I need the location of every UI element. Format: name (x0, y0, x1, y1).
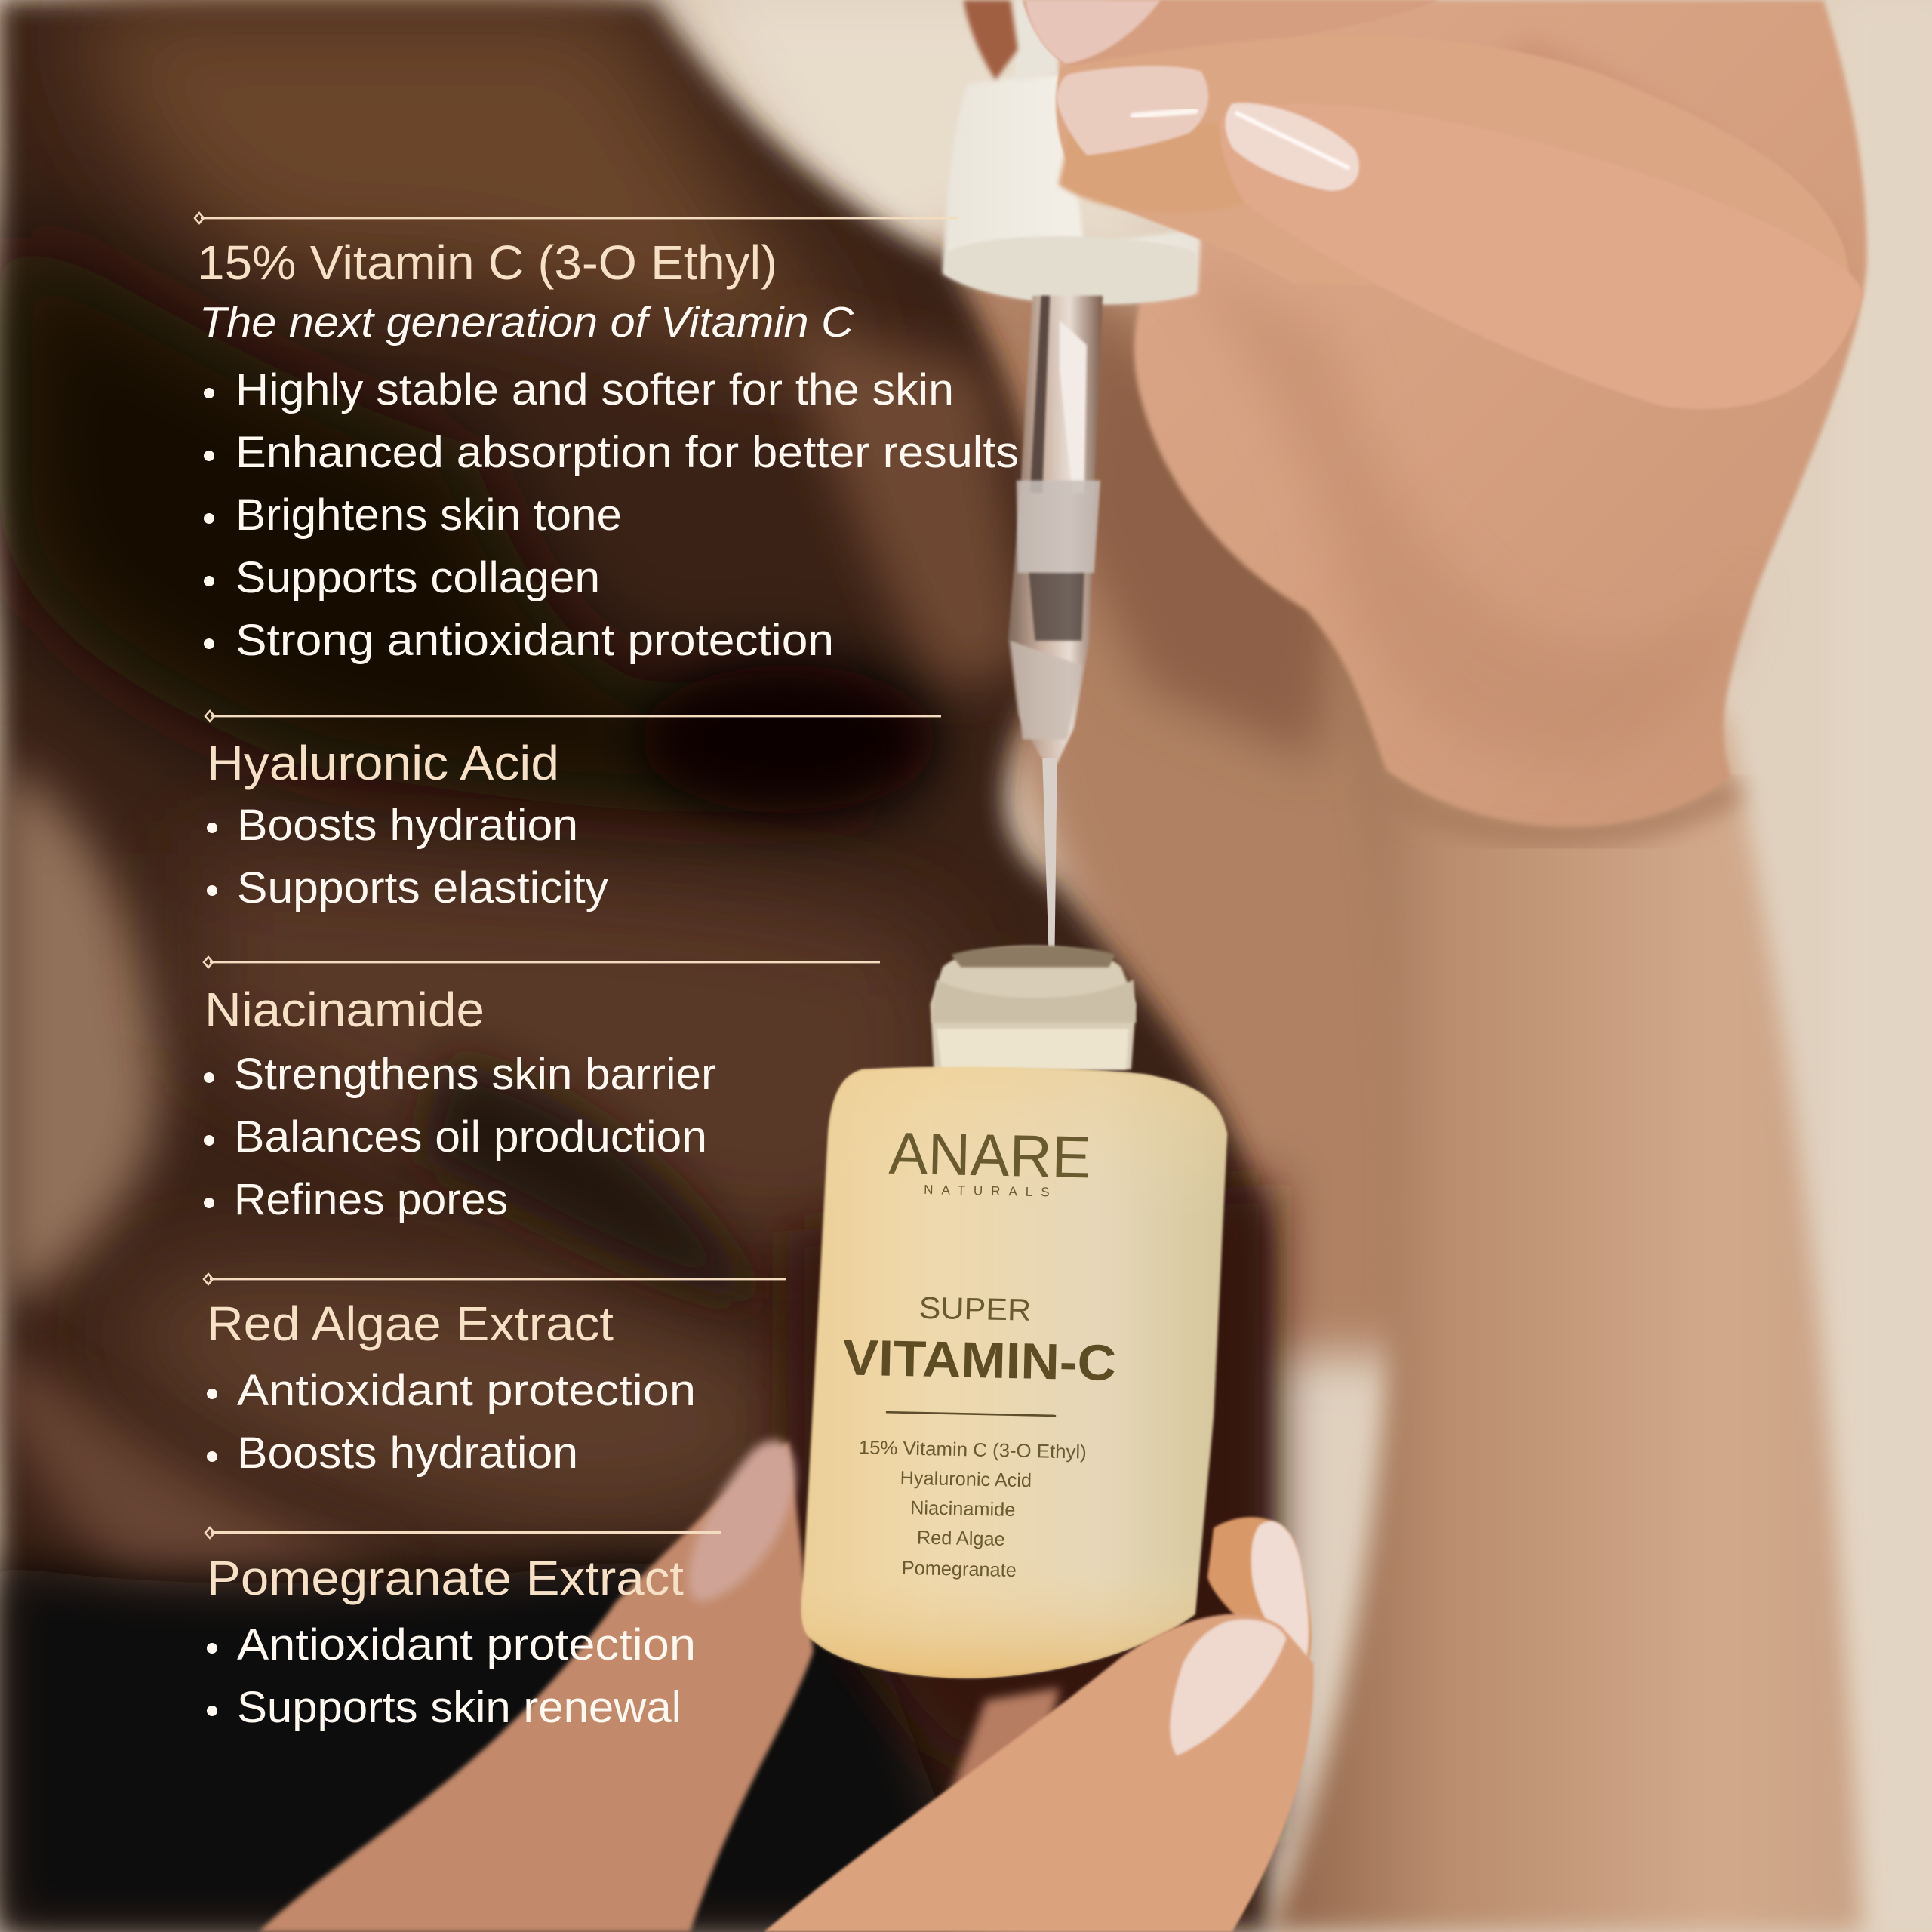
bullet list: Supports collagen (235, 553, 600, 602)
upper hand (1048, 0, 1867, 826)
bullet list: Supports skin renewal (237, 1683, 681, 1732)
dark hair mid spot (641, 666, 937, 814)
bullet list: Brightens skin tone (235, 491, 622, 540)
white dropper cap (943, 0, 1201, 303)
blurred hair (0, 0, 1269, 1932)
divider with diamond (205, 1527, 721, 1538)
dark lower area (0, 1563, 986, 1932)
bullet list: Strong antioxidant protection (235, 616, 834, 665)
middle finger (1056, 36, 1849, 296)
bullet list (207, 1366, 696, 1478)
bullet list: Antioxidant protection (237, 1620, 696, 1669)
bottom hand (259, 1441, 1060, 1932)
ingredient list (856, 1437, 1087, 1583)
lighter hair waves (197, 851, 946, 1257)
brand sub: NATURALS (924, 1182, 1050, 1199)
dark hair band (0, 222, 912, 812)
bottle neck (931, 946, 1136, 1069)
section: vitamin C (195, 213, 1019, 665)
section: niacinamide (204, 957, 880, 1224)
index finger (1220, 103, 1863, 409)
bullet list: Supports elasticity (237, 863, 608, 912)
ingredient list: Hyaluronic Acid (900, 1468, 1032, 1491)
bullet list: Balances oil production (234, 1112, 707, 1161)
blurred skin at left (0, 764, 160, 1306)
bullet list (204, 365, 1019, 665)
forearm (1269, 641, 1863, 1932)
ingredient list: 15% Vitamin C (3-O Ethyl) (859, 1437, 1087, 1463)
bullet list (207, 801, 608, 912)
section: hyaluronic acid (205, 711, 941, 912)
divider with diamond (204, 957, 880, 968)
bullet list: Boosts hydration (237, 1429, 578, 1478)
bullet list (204, 1050, 716, 1224)
wrist crease (1380, 789, 1737, 835)
bottle label (838, 1119, 1121, 1583)
bottle body (801, 1067, 1227, 1678)
brand name: ANARE (888, 1120, 1091, 1190)
section: red algae (204, 1274, 786, 1478)
ingredient list: Red Algae (917, 1527, 1005, 1550)
heading: Niacinamide (205, 983, 485, 1037)
top finger and nail (1023, 0, 1439, 74)
subtitle: The next generation of Vitamin C (199, 298, 854, 346)
bullet list: Refines pores (234, 1175, 508, 1224)
hair highlight top (74, 0, 863, 370)
bullet list: Antioxidant protection (237, 1366, 696, 1415)
bullet list: Strengthens skin barrier (234, 1050, 716, 1099)
ingredient list: Pomegranate (902, 1558, 1017, 1581)
divider with diamond (204, 1274, 786, 1284)
hair highlight right (789, 320, 1035, 690)
bottom fingers (764, 1517, 1314, 1932)
ingredient list: Niacinamide (910, 1497, 1016, 1521)
index nail (1225, 103, 1359, 191)
dropper pipette (1008, 296, 1103, 949)
middle nail (1057, 66, 1343, 345)
bullet list (207, 1620, 696, 1732)
heading: Red Algae Extract (207, 1297, 614, 1351)
bullet list: Highly stable and softer for the skin (235, 365, 954, 414)
VITAMIN-C: VITAMIN-C (842, 1329, 1117, 1392)
bullet list: Boosts hydration (237, 801, 578, 850)
heading: 15% Vitamin C (3-O Ethyl) (197, 235, 777, 290)
label rule (886, 1411, 1056, 1417)
heading: Pomegranate Extract (207, 1551, 684, 1605)
divider with diamond (205, 711, 941, 721)
far right background (1836, 0, 1932, 1932)
SUPER: SUPER (918, 1291, 1032, 1327)
heading: Hyaluronic Acid (207, 736, 559, 790)
bullet list: Enhanced absorption for better results (235, 428, 1019, 477)
neck and shoulder skin (937, 234, 1478, 1355)
panel: ingredient list (195, 213, 1019, 1732)
shaded neck under hand (1060, 284, 1343, 764)
divider with diamond (195, 213, 958, 223)
section: pomegranate (205, 1527, 721, 1732)
